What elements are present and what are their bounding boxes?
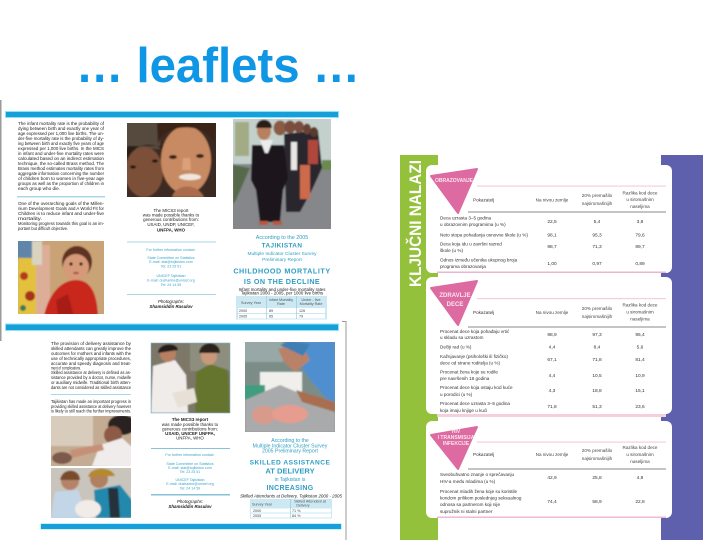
table rows: 10,5 bbox=[592, 373, 602, 379]
heading: skilled assistance: INCREASING bbox=[267, 485, 314, 492]
table rows: Neto stopa pohađanja osnovne škole (u %) bbox=[440, 232, 528, 238]
table rows: Procenat dece koja pohađaju vrtić bbox=[440, 329, 510, 334]
text block: report credits: generous contributions from: bbox=[162, 426, 218, 432]
photo: two smiling children bbox=[125, 121, 218, 199]
heading: according to MICS: According to the bbox=[271, 438, 309, 444]
photo: nurse with newborn bbox=[51, 416, 131, 466]
table rows: u porodici (u %) bbox=[440, 392, 473, 397]
table rows: odnosa sa partnerom koji nije bbox=[440, 502, 500, 507]
text block: skilled attendants: dants are not considered as skilled assistance bbox=[51, 385, 131, 390]
text block: contacts: State Committee on Statistics bbox=[147, 256, 195, 260]
table rows: 81,4 bbox=[635, 357, 645, 363]
table rows: 23,6 bbox=[635, 404, 645, 410]
heading: skilled assistance: in Tajikistan is bbox=[275, 477, 306, 483]
text block: skilled attendants: The provision of delivery assistance by bbox=[51, 341, 132, 346]
table header bbox=[473, 445, 658, 464]
ribbon: child health: DECE bbox=[447, 302, 463, 308]
table rows: 25,8 bbox=[592, 475, 602, 481]
table rows: 5,4 bbox=[594, 219, 601, 225]
text block: report credits: USAID, UNICEF UNFPA, bbox=[165, 431, 215, 436]
table: mortality rates: Infant Mortality bbox=[269, 298, 293, 302]
table rows: škole (u %) bbox=[440, 248, 463, 253]
text block: contacts: E-mail: stat@tojikiston.com bbox=[168, 466, 212, 470]
table rows: programa obrazovanja bbox=[440, 264, 486, 269]
table rows: 67,1 bbox=[547, 357, 557, 363]
table rows: Procenat dece koja ostaju kod kuće bbox=[440, 385, 513, 390]
ribbon: education: OBRAZOVANJE bbox=[435, 178, 473, 184]
table rows: koja imaju knjige u kući bbox=[440, 408, 487, 413]
table header: Pokazatelj bbox=[473, 310, 494, 315]
table rows: Deca koja idu u završni razred bbox=[440, 242, 502, 246]
table rows: 5,6 bbox=[637, 344, 644, 350]
photo credit: Shamsiddin Rasulov bbox=[168, 504, 212, 509]
table: mortality rates: Tajikistan 2000 - 2005, per 1000 live births bbox=[241, 290, 324, 296]
leaflet edge lines bbox=[0, 100, 346, 540]
table header: 20% premašilo bbox=[582, 193, 613, 198]
table rows bbox=[440, 329, 645, 413]
table rows: 79,6 bbox=[635, 232, 645, 238]
table: mortality rates: 126 bbox=[299, 309, 305, 313]
table: mortality rates: 2005 bbox=[239, 314, 247, 318]
heading: skilled assistance: AT DELIVERY bbox=[265, 466, 315, 476]
text block: skilled attendants bbox=[51, 341, 132, 390]
table: mortality rates: Under - five bbox=[301, 298, 321, 302]
table rows: 22,5 bbox=[547, 219, 557, 225]
table header: najsiromašnijih bbox=[582, 456, 613, 461]
photo credit: Photographs: bbox=[177, 499, 204, 504]
table rows: 51,3 bbox=[592, 404, 602, 410]
table header: Razlika kod dece bbox=[623, 302, 658, 308]
table rows: 4,4 bbox=[549, 344, 556, 350]
table rows: 98,9 bbox=[547, 332, 557, 338]
table rows: Procenat mladih žena koje su koristile bbox=[440, 489, 518, 494]
table rows: 0,97 bbox=[592, 261, 602, 267]
text block: infant mortality: aggregate information concerning the number bbox=[18, 171, 105, 176]
table rows: 71,3 bbox=[592, 244, 602, 250]
table header: Razlika kod dece bbox=[623, 190, 658, 196]
text block: contacts: Tel: 23 25 51 bbox=[180, 470, 200, 474]
text block: infant mortality: each group who die. bbox=[18, 186, 60, 191]
text block: contacts: Tel: 24 14 59 bbox=[180, 486, 200, 490]
table: mortality rates: Mortality Rate bbox=[300, 302, 322, 306]
text block: millennium goals: One of the overarching goals of the Millen- bbox=[18, 201, 105, 206]
table header: u siromašnim bbox=[626, 197, 654, 202]
panel: HIV knowledge bbox=[426, 421, 672, 518]
table header: najsiromašnijih bbox=[582, 314, 613, 319]
table: mortality rates: Rate bbox=[277, 302, 285, 306]
text block: infant mortality: expressed per 1,000 live births. In the MICS bbox=[18, 146, 104, 151]
table header: 20% premašilo bbox=[582, 306, 613, 311]
table rows: Deca uzrasta 3–5 godina bbox=[440, 216, 492, 220]
heading: according to the 2005 Tajikistan: Multiple Indicator Cluster Survey bbox=[247, 251, 317, 257]
table header: Na nivou zemlje bbox=[536, 452, 569, 457]
table header: u siromašnim bbox=[626, 310, 654, 314]
heading: according to the 2005 Tajikistan: According to the 2005 bbox=[256, 235, 308, 241]
title: … leaflets … bbox=[76, 39, 360, 93]
text block: skilled attendants: sistance provided by a doctor, nurse, midwife bbox=[51, 375, 131, 380]
table rows: 8,4 bbox=[594, 344, 601, 350]
text block: infant mortality: of children born to women in five-year age bbox=[18, 176, 105, 181]
heading: skilled assistance: SKILLED ASSISTANCE bbox=[250, 460, 330, 466]
purple side band bbox=[661, 155, 703, 540]
table header: Pokazatelj bbox=[473, 452, 494, 457]
table header: Razlika kod dece bbox=[623, 445, 658, 450]
text block: millennium goals: nium Development Goals and A World Fit for bbox=[18, 206, 105, 211]
table: mortality rates: Infant mortality and under-five mortality rates bbox=[239, 287, 326, 292]
table header: Na nivou zemlje bbox=[536, 310, 569, 315]
text block: report credits: USAID, UNDP, UNICEF, bbox=[147, 222, 195, 227]
table rows: pre navršenih 18 godina bbox=[440, 376, 490, 381]
table rows: 1,00 bbox=[547, 261, 557, 267]
green side band bbox=[400, 155, 438, 540]
table rows: 95,4 bbox=[635, 332, 645, 338]
photo credit bbox=[168, 499, 212, 509]
photo: mother and midwife with baby bbox=[51, 468, 131, 518]
text block: report credits: UNFPA, WHO bbox=[176, 436, 204, 440]
top bar bbox=[5, 111, 339, 118]
bottom bar bbox=[6, 324, 338, 325]
table rows: u skladu sa uzrastom bbox=[440, 335, 484, 340]
table rows: 95,3 bbox=[592, 232, 602, 238]
table rows: 10,9 bbox=[635, 373, 645, 379]
heading: according to the 2005 Tajikistan: TAJIKISTAN bbox=[262, 242, 302, 250]
text block: Tajikistan progress: is likely to still reach the further improvements. bbox=[51, 408, 131, 414]
table rows: Dečiji rad (u %) bbox=[440, 344, 472, 350]
table rows: kondom prilikom poslednjeg seksualnog bbox=[440, 496, 522, 500]
text block: infant mortality: ing between birth and exactly five years of age bbox=[18, 141, 105, 146]
table header bbox=[473, 302, 658, 322]
table rows: 4,4 bbox=[549, 373, 556, 379]
text block: millennium goals: Children is to reduce infant and under-five bbox=[18, 211, 105, 216]
leaflet: childhood mortality bbox=[5, 111, 339, 325]
text block: infant mortality: groups as well as the proportion of children in bbox=[18, 181, 105, 186]
photo: line of schoolchildren bbox=[231, 117, 333, 231]
table rows: HIV-a među mladima (u %) bbox=[440, 479, 496, 484]
photo credit: Photographs: bbox=[158, 299, 185, 304]
top bar bbox=[5, 324, 339, 331]
table rows: 4,9 bbox=[637, 475, 644, 481]
table rows: 0,89 bbox=[635, 261, 645, 267]
heading: childhood mortality: IS ON THE DECLINE bbox=[244, 277, 320, 286]
text block: skilled attendants: accurate and speedy diagnosis and treat- bbox=[51, 361, 132, 366]
table: skilled attendants: 2000 bbox=[253, 509, 261, 513]
ribbon: HIV knowledge: HIV bbox=[452, 429, 461, 435]
table rows: 98,1 bbox=[547, 232, 557, 238]
table rows: 4,3 bbox=[549, 388, 556, 394]
text block: report credits: was made possible thanks to bbox=[143, 212, 200, 218]
table rows: 58,9 bbox=[592, 499, 602, 505]
table rows: 89,7 bbox=[635, 244, 645, 250]
text block: millennium goals bbox=[18, 201, 105, 231]
table: skilled attendants: 2005 bbox=[253, 514, 261, 518]
heading: according to the 2005 Tajikistan: Preliminary Report bbox=[262, 257, 303, 263]
heading: according to MICS bbox=[253, 438, 328, 454]
heading: according to the 2005 Tajikistan bbox=[247, 235, 317, 263]
panel: education bbox=[426, 165, 672, 273]
table rows: Procenat dece uzrasta 3–5 godina bbox=[440, 401, 510, 406]
text block: Tajikistan progress bbox=[51, 399, 132, 414]
table: mortality rates: 89 bbox=[269, 309, 273, 313]
table header: najsiromašnijih bbox=[582, 201, 613, 206]
table: skilled attendants: Survey Year bbox=[252, 502, 273, 506]
table: skilled attendants: Skilled Attendant at bbox=[294, 500, 326, 504]
text block: report credits bbox=[162, 417, 219, 440]
text block: report credits: was made possible thanks to bbox=[162, 422, 219, 427]
text block: infant mortality: dying between birth and exactly one year of bbox=[18, 126, 105, 131]
heading: according to MICS: 2005 Preliminary Report bbox=[262, 448, 319, 454]
text block: infant mortality: technique, the so-called Brass method. The bbox=[18, 161, 105, 166]
table: skilled attendants: Delivery bbox=[296, 504, 310, 508]
booklet page: key findings bbox=[400, 155, 703, 540]
table rows: 71,8 bbox=[592, 357, 602, 363]
text block: skilled attendants: or auxiliary midwife. Traditional birth atten- bbox=[51, 380, 132, 385]
table rows: 42,9 bbox=[547, 475, 557, 481]
table header: u siromašnim bbox=[626, 452, 654, 457]
ribbon: child health: ZDRAVLJE bbox=[439, 293, 471, 299]
table: mortality rates bbox=[236, 287, 327, 320]
table: skilled attendants: Skilled Attendants at Delivery, Tajikistan 2000 - 2005 bbox=[240, 494, 342, 498]
table rows: 97,3 bbox=[592, 332, 602, 338]
table rows: Sveobuhvatno znanje o sprečavanju bbox=[440, 472, 515, 477]
ribbon: HIV knowledge: I TRANSMISIJA bbox=[438, 435, 475, 441]
photo credit: Shamsiddin Rasulov bbox=[149, 304, 193, 309]
table rows: dece od strane roditelja (u %) bbox=[440, 360, 500, 366]
table header: naseljima bbox=[630, 204, 650, 209]
table header: Na nivou zemlje bbox=[536, 198, 569, 202]
leaflet: skilled assistance at delivery bbox=[5, 324, 342, 530]
text block: contacts bbox=[165, 453, 215, 490]
table rows bbox=[440, 216, 645, 269]
table: skilled attendants: 71 % bbox=[292, 509, 301, 513]
table header: Pokazatelj bbox=[473, 198, 494, 202]
text block: infant mortality: calculated based on an indirect estimation bbox=[18, 156, 105, 161]
text block: report credits bbox=[143, 208, 200, 232]
text block: skilled attendants: ment of complications. bbox=[51, 366, 81, 370]
ribbon: HIV knowledge: INFEKCIJE bbox=[443, 441, 470, 447]
table: mortality rates: 79 bbox=[299, 314, 303, 318]
ribbon: education bbox=[431, 169, 477, 213]
text block: infant mortality: der-five mortality rate is the probability of dy- bbox=[18, 136, 105, 141]
text block: Tajikistan progress: providing skilled assistance at delivery however bbox=[51, 404, 131, 409]
photo credit bbox=[149, 299, 193, 309]
table rows: u obrazovnim programima (u %) bbox=[440, 222, 506, 227]
table rows: 71,8 bbox=[547, 404, 557, 410]
table rows: Kažnjavanje (psihološki ili fizičko) bbox=[440, 354, 508, 359]
table rows bbox=[440, 472, 645, 514]
text block: contacts: For further information contact: bbox=[165, 453, 215, 457]
table rows: 15,1 bbox=[635, 388, 645, 394]
text block: contacts: E-mail: dushanbe@unicef.org bbox=[147, 278, 195, 282]
table: mortality rates: Survey Year bbox=[241, 301, 262, 305]
photo: midwife with newborn bbox=[243, 340, 337, 434]
table header bbox=[473, 190, 658, 209]
table header: 20% premašilo bbox=[582, 448, 613, 453]
table rows: Odnos između učenika ukupnog broja bbox=[440, 258, 518, 262]
text block: skilled attendants: skilled attendants can greatly improve the bbox=[51, 346, 132, 351]
panel: child health bbox=[426, 277, 672, 417]
text block: infant mortality: Brass method estimates mortality rates from bbox=[18, 166, 104, 171]
text block: contacts bbox=[146, 248, 196, 287]
table rows: 18,8 bbox=[592, 388, 602, 394]
text block: contacts: Tel: 24 14 59 bbox=[161, 283, 181, 287]
heading: childhood mortality bbox=[233, 266, 331, 286]
text block: millennium goals: Monitoring progress towards this goal is an im- bbox=[18, 221, 105, 226]
heading: skilled assistance bbox=[250, 460, 330, 492]
table rows: supružnik ni stalni partner bbox=[440, 509, 493, 514]
bottom bar bbox=[40, 524, 342, 530]
text block: millennium goals: mortality. bbox=[18, 216, 42, 221]
text block: report credits: generous contributions from: bbox=[143, 217, 199, 222]
text block: contacts: E-mail: stat@tojikiston.com bbox=[149, 260, 193, 264]
table: skilled attendants bbox=[240, 494, 342, 518]
table: mortality rates: 2000 bbox=[239, 309, 247, 313]
text block: skilled attendants: use of technically appropriate procedures, bbox=[51, 356, 131, 361]
table header: naseljima bbox=[630, 316, 650, 322]
table rows: Procenat žena koje su rodile bbox=[440, 370, 498, 374]
vertical heading: KLJUČNI NALAZI bbox=[406, 160, 425, 287]
table rows: 3,8 bbox=[637, 219, 644, 225]
text block: infant mortality: The infant mortality rate is the probability of bbox=[18, 121, 105, 126]
text block: Tajikistan progress: Tajikistan has made an important progress in bbox=[51, 399, 132, 404]
text block: report credits: UNFPA, WHO bbox=[157, 228, 186, 232]
heading: according to MICS: Multiple Indicator Cluster Survey bbox=[253, 444, 328, 450]
text block: skilled attendants: outcomes for mothers and infants with the bbox=[51, 351, 132, 356]
ribbon: child health bbox=[431, 281, 477, 325]
text block: contacts: For further information contact: bbox=[146, 248, 196, 252]
text block: contacts: UNICEF Tajikistan bbox=[156, 274, 186, 278]
text block: contacts: UNICEF Tajikistan bbox=[175, 478, 205, 482]
photo: two health workers reading bbox=[149, 341, 232, 415]
text block: infant mortality: age expressed per 1,000 live births. The un- bbox=[18, 131, 105, 136]
ribbon: HIV knowledge bbox=[431, 427, 477, 469]
text block: report credits: The MICS3 report bbox=[154, 208, 189, 213]
table rows: 98,7 bbox=[547, 244, 557, 250]
text block: contacts: E-mail: dushanbe@unicef.org bbox=[166, 482, 214, 486]
table rows: 22,8 bbox=[635, 499, 645, 505]
text block: skilled attendants: Skilled assistance at delivery is defined as as- bbox=[51, 370, 131, 375]
photo: baby in red bbox=[18, 241, 104, 314]
table header: naseljima bbox=[630, 459, 650, 464]
table rows: 74,4 bbox=[547, 499, 557, 505]
text block: millennium goals: portant but difficult objective. bbox=[18, 226, 68, 231]
text block: contacts: State Committee on Statistics bbox=[166, 462, 214, 466]
table: skilled attendants: 84 % bbox=[292, 514, 301, 518]
text block: infant mortality bbox=[18, 121, 105, 191]
text block: contacts: Tel: 23 25 51 bbox=[161, 264, 181, 268]
text block: report credits: The MICS3 report bbox=[172, 417, 209, 422]
heading: childhood mortality: CHILDHOOD MORTALITY bbox=[233, 266, 331, 276]
text block: infant mortality: in infant and under-five mortality rates were bbox=[18, 151, 105, 156]
table: mortality rates: 65 bbox=[269, 314, 273, 318]
